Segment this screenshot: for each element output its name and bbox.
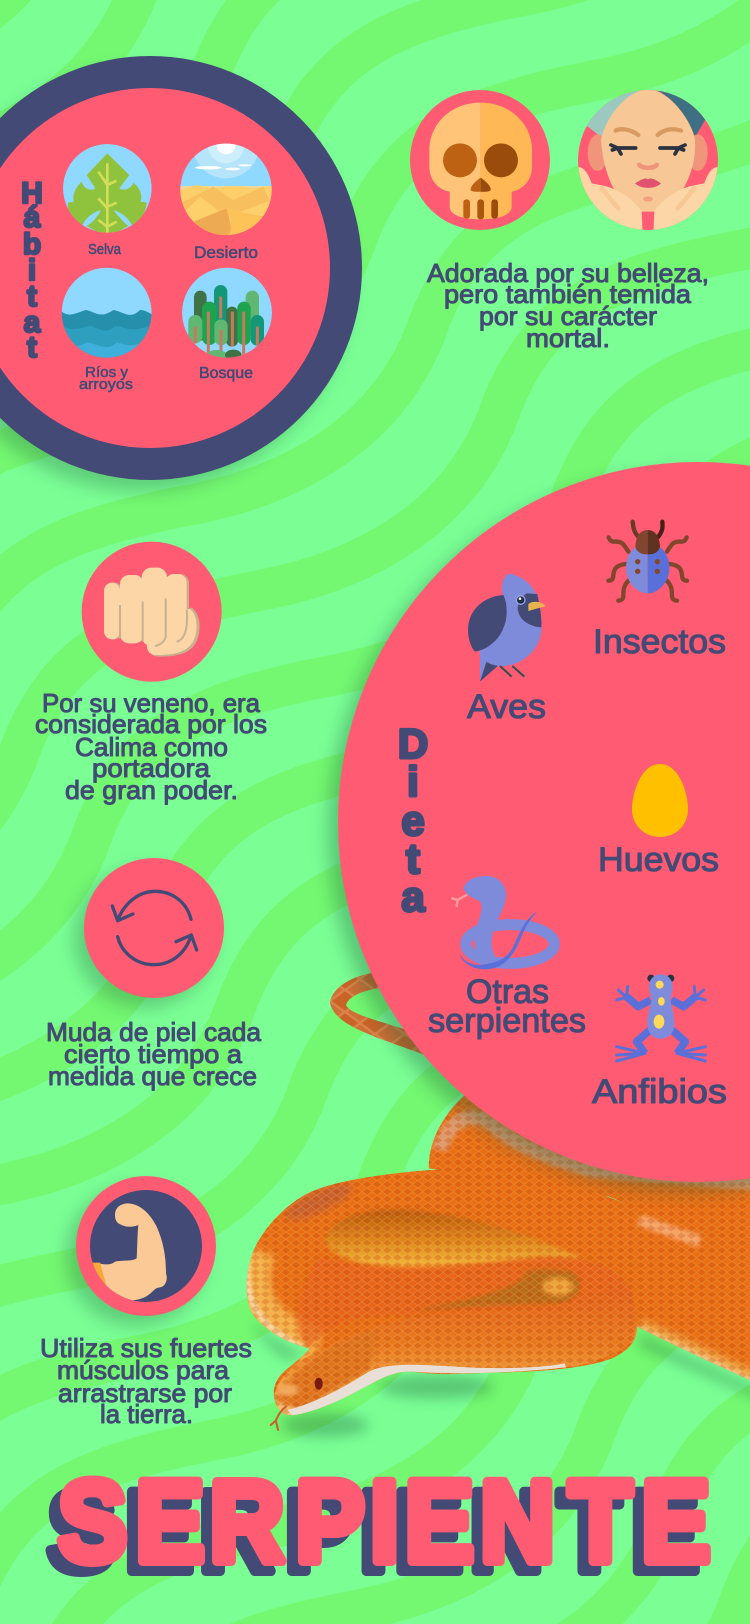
label: Huevos: Huevos <box>598 841 719 879</box>
text: Adorada por su belleza: por su carácter <box>479 301 657 331</box>
snake: tongue <box>271 1407 286 1430</box>
text: Por su veneno <box>35 688 267 805</box>
icon: muscle <box>66 1176 216 1326</box>
snake: eye <box>315 1378 323 1390</box>
icon: desierto <box>180 144 272 235</box>
text: Por su veneno: portadora <box>92 753 211 783</box>
snake: main body <box>246 1170 750 1416</box>
text: Adorada por su belleza: pero también temida <box>444 279 692 309</box>
icon: beauty face <box>575 87 722 233</box>
label: Bosque: Bosque <box>199 365 253 382</box>
label: Anfibios: Anfibios <box>592 1073 727 1111</box>
text: Por su veneno: considerada por los <box>35 709 267 739</box>
icon: bosque <box>182 268 272 360</box>
label: Otras serpientes: serpientes <box>428 1002 586 1040</box>
text: Utiliza sus fuertes: arrastrarse por <box>58 1378 232 1408</box>
text: Por su veneno: Por su veneno, era <box>42 688 261 718</box>
icon: frog <box>617 974 705 1061</box>
icon: egg <box>632 764 688 837</box>
snake: thin tail loop <box>330 972 425 1055</box>
label: Insectos: Insectos <box>593 623 726 661</box>
icon: fist <box>82 542 222 682</box>
heading: Dieta: t <box>406 835 420 882</box>
heading: Dieta: i <box>407 758 419 805</box>
panel: habitat <box>0 56 362 491</box>
text: Por su veneno: Calima como <box>75 732 228 762</box>
text: Muda de piel: medida que crece <box>48 1061 257 1091</box>
icon: rios <box>62 268 153 360</box>
label: Ríos y arroyos: arroyos <box>79 376 133 393</box>
heading: Dieta: D <box>398 720 428 767</box>
icon: cycle <box>74 858 224 1008</box>
heading: Hábitat: H <box>21 177 43 210</box>
heading: Hábitat: á <box>24 201 41 234</box>
text: Adorada por su belleza: mortal. <box>526 323 610 353</box>
label: Ríos y arroyos <box>79 364 133 393</box>
heading: Dieta: a <box>401 873 425 920</box>
habitat icons <box>62 112 272 360</box>
heading: Hábitat: t <box>27 280 37 313</box>
panel: dieta <box>328 462 750 1192</box>
title: SERPIENTE <box>47 1468 699 1596</box>
text: Por su veneno: de gran poder. <box>65 775 238 805</box>
label: Desierto: Desierto <box>194 243 258 262</box>
text: Adorada por su belleza <box>427 258 709 353</box>
text: Utiliza sus fuertes <box>40 1333 252 1429</box>
title: SERPIENTE <box>58 1458 710 1586</box>
label: Otras serpientes: Otras <box>466 973 549 1011</box>
icon: skull <box>410 90 550 230</box>
icon: selva leaf <box>63 144 152 233</box>
label: Otras serpientes <box>428 973 586 1040</box>
label: Ríos y arroyos: Ríos y <box>85 364 128 381</box>
icon: snake <box>452 876 554 969</box>
text: Utiliza sus fuertes: músculos para <box>57 1355 230 1385</box>
heading: Hábitat: t <box>27 331 37 364</box>
snake: neck and head <box>274 1292 636 1416</box>
text: Muda de piel: Muda de piel cada <box>46 1017 262 1047</box>
icon: bug <box>608 522 687 601</box>
label: Aves: Aves <box>467 688 546 726</box>
heading: Dieta: e <box>401 797 425 844</box>
text: Adorada por su belleza: Adorada por su belleza, <box>427 258 709 288</box>
text: Muda de piel <box>46 1017 262 1091</box>
text: Utiliza sus fuertes: Utiliza sus fuertes <box>40 1333 252 1363</box>
heading: Hábitat: i <box>28 254 36 287</box>
snake: rear coil <box>429 1093 750 1257</box>
label: Selva: Selva <box>88 241 122 258</box>
snake shadow <box>254 1320 750 1437</box>
text: Muda de piel: cierto tiempo a <box>64 1039 243 1069</box>
heading: Hábitat: a <box>24 306 41 339</box>
snake photo <box>220 972 750 1437</box>
text: Utiliza sus fuertes: la tierra. <box>100 1399 193 1429</box>
icon: bird <box>468 574 546 682</box>
heading: Hábitat: b <box>23 228 41 261</box>
